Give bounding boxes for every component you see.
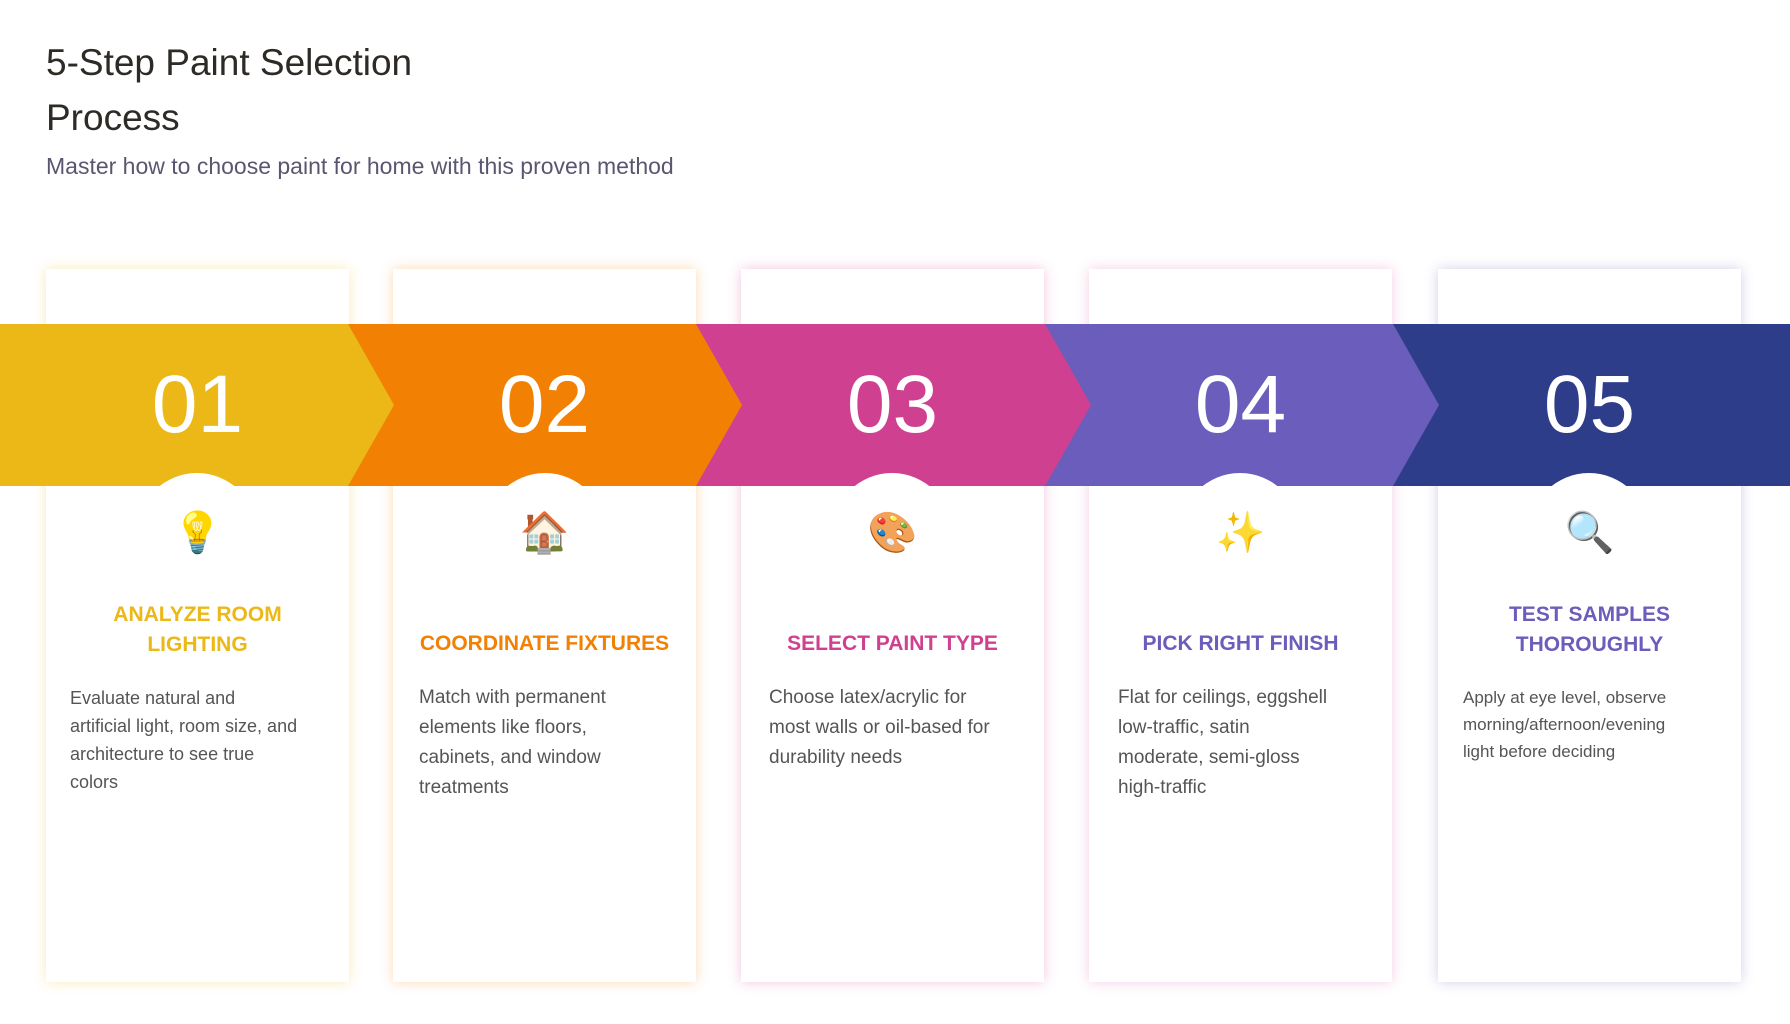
icon: sparkles: ✨ [1216,509,1265,556]
text 5: Apply at eye level, observe morning/afternoon/evening light before deciding [1463,688,1666,761]
card 3 [741,269,1044,982]
heading 1: ANALYZE ROOM [113,603,282,626]
number 05: 05 [1544,359,1635,450]
text 4: Flat for ceilings, eggshell low‑traffic, satin moderate, semi‑gloss high‑traffic [1118,687,1327,798]
text 3: Choose latex/acrylic for most walls or oil-based for durability needs [769,687,990,768]
text 1: Evaluate natural and artificial light, room size, and architecture to see true colors [70,688,297,792]
card 5 [1438,269,1741,982]
title: Process [46,97,180,138]
icon: magnifier: 🔍 [1565,509,1614,556]
title: 5-Step Paint Selection [46,42,412,83]
heading 5: TEST SAMPLES [1509,603,1670,626]
icon: house: 🏠 [520,509,569,556]
heading 2: COORDINATE FIXTURES [420,632,669,655]
text 2: Match with permanent elements like floors, cabinets, and window treatments [419,687,606,798]
heading 5: THOROUGHLY [1516,633,1663,656]
icon: palette: 🎨 [868,509,917,556]
card 4 [1089,269,1392,982]
title [46,42,412,138]
heading 1: LIGHTING [147,633,248,656]
number 03: 03 [847,359,938,450]
heading 5 [1509,603,1670,656]
card 1 [46,269,349,982]
number 02: 02 [499,359,590,450]
icon: bulb: 💡 [173,509,222,556]
number 01: 01 [152,359,243,450]
card 2 [393,269,696,982]
heading 4: PICK RIGHT FINISH [1142,632,1338,655]
number 04: 04 [1195,359,1286,450]
heading 3: SELECT PAINT TYPE [787,632,998,655]
heading 1 [113,603,282,656]
subtitle: Master how to choose paint for home with this proven method [46,153,674,179]
